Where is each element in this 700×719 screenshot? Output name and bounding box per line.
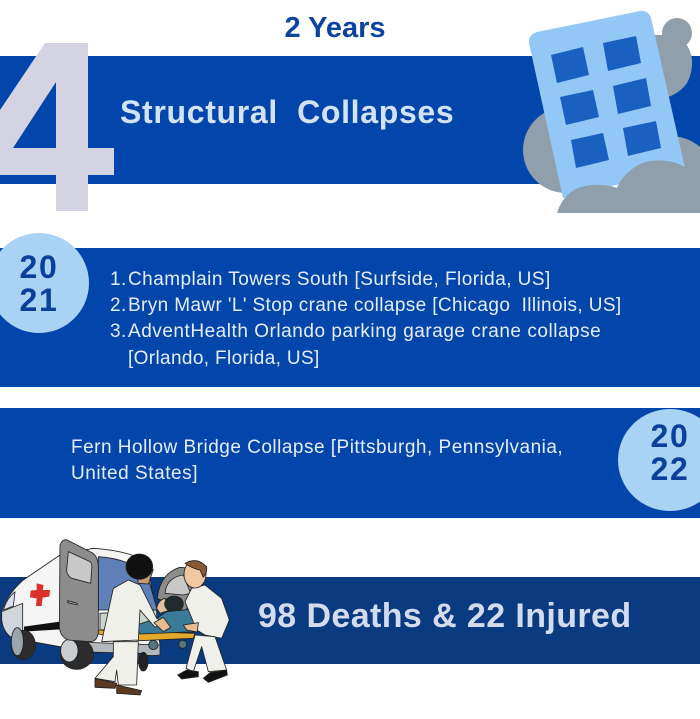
badge: 2022: 22 <box>650 451 690 487</box>
list: 2021 collapses: Champlain Towers South [Surfside, Florida, US] <box>128 269 551 290</box>
banner heading: structural collapses: Structural Collapses <box>120 94 454 130</box>
badge: 2021: 20 <box>20 249 58 285</box>
panel: 2022 <box>0 408 700 518</box>
casualties text: 98 Deaths & 22 Injured <box>258 597 632 635</box>
list: 2021 collapses: 1. <box>110 269 127 290</box>
badge: 2021: 21 <box>20 282 58 318</box>
big number 4 <box>0 43 114 211</box>
text: Fern Hollow: United States] <box>71 463 198 484</box>
banner: casualties <box>0 577 700 664</box>
text: Fern Hollow <box>71 437 563 484</box>
list: 2021 collapses <box>110 269 622 369</box>
heading: 2 Years: 2 Years <box>284 12 386 44</box>
list: 2021 collapses: AdventHealth Orlando parking garage crane collapse <box>128 321 601 342</box>
badge: 2022: 20 <box>650 418 690 454</box>
list: 2021 collapses: [Orlando, Florida, US] <box>128 348 320 369</box>
text: Fern Hollow: Fern Hollow Bridge Collapse [Pittsburgh, Pennsylvania, <box>71 437 563 458</box>
banner: structural collapses <box>0 56 700 184</box>
badge: 2021 <box>0 233 89 333</box>
list: 2021 collapses: 3. <box>110 321 127 342</box>
illustration: ambulance and paramedics <box>1 539 230 696</box>
list: 2021 collapses: Bryn Mawr 'L' Stop crane collapse [Chicago Illinois, US] <box>128 295 622 316</box>
list: 2021 collapses: 2. <box>110 295 127 316</box>
badge: 2022 <box>618 409 700 511</box>
icon: collapsing building <box>523 10 700 213</box>
panel: 2021 <box>0 248 700 387</box>
